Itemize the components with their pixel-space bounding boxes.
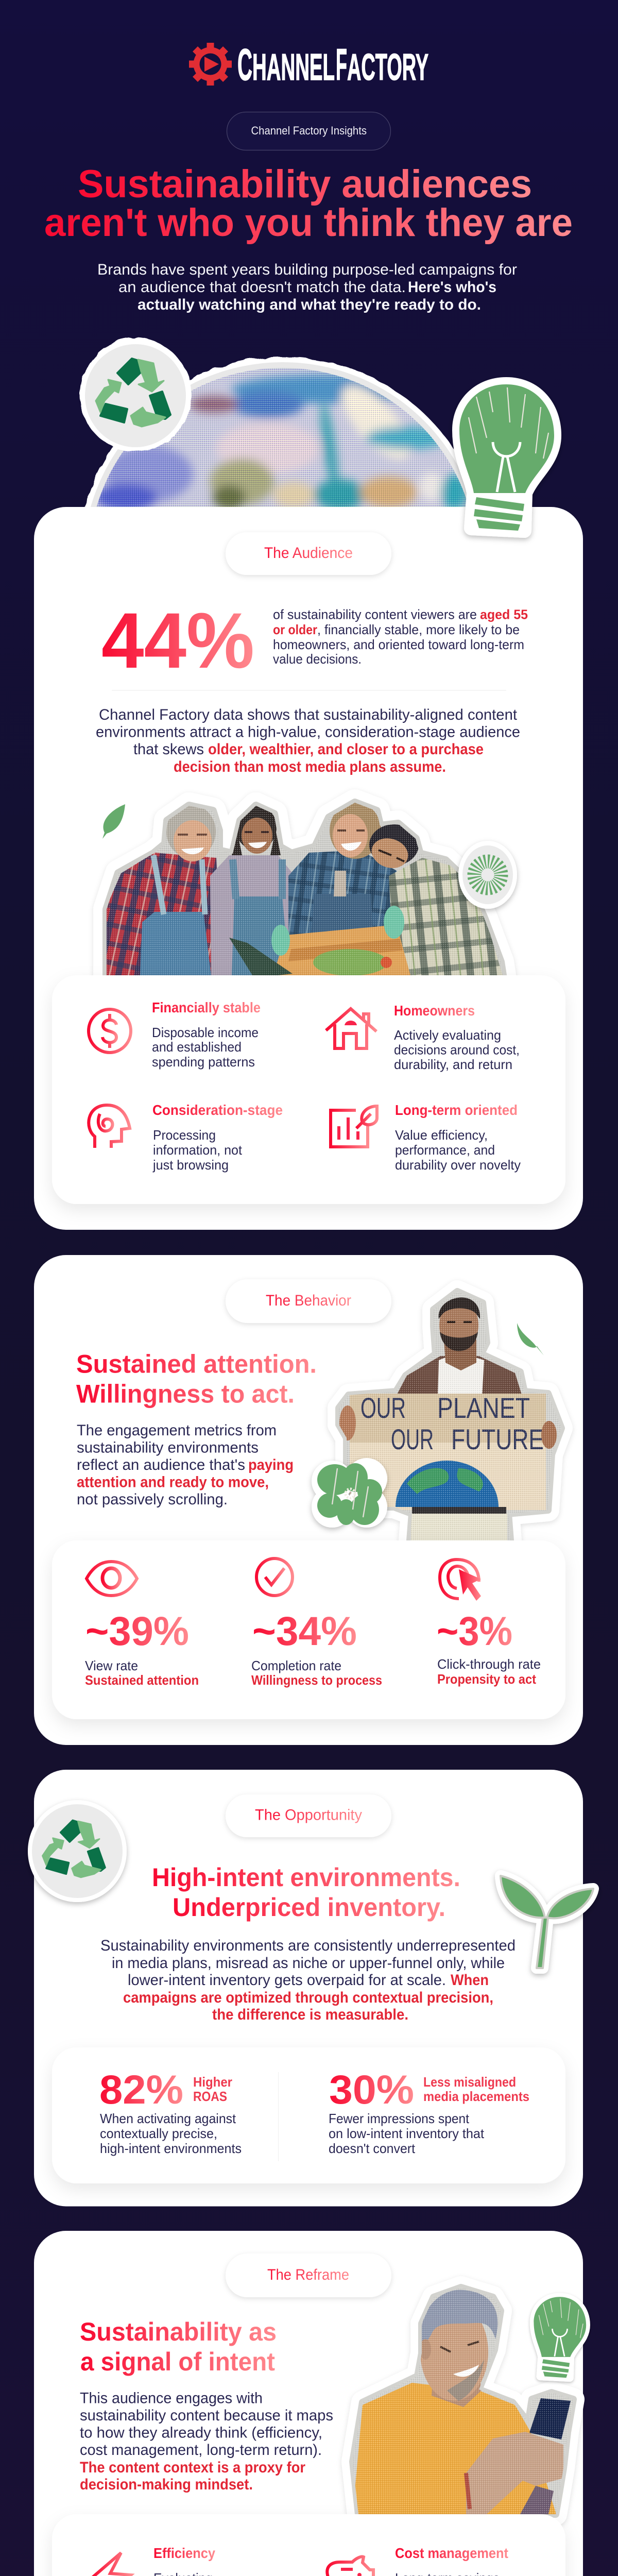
- trait: financially stable: and established: [152, 1039, 242, 1055]
- sticker: green starburst: [458, 841, 517, 909]
- icon: chart and leaf: [331, 1106, 377, 1147]
- metric: click-through rate: ~3%: [437, 1608, 512, 1654]
- icon: eye: [87, 1562, 137, 1596]
- intro text: an audience that doesn't match the data.: [118, 279, 406, 296]
- body text: When: [451, 1972, 489, 1989]
- icon: click target: [440, 1560, 481, 1601]
- hero sticker: recycle badge: [80, 338, 191, 451]
- icon: head with spiral: [89, 1105, 130, 1148]
- paragraph: older, wealthier, and closer to a purchase: [208, 741, 484, 758]
- metric: view rate: [85, 1562, 199, 1688]
- stat description: of sustainability content viewers are: [273, 607, 477, 622]
- trait: homeowners: Actively evaluating: [394, 1027, 501, 1043]
- stat: 82% higher ROAS: [99, 2066, 242, 2156]
- icon: dollar coin: [89, 1009, 131, 1053]
- trait: consideration-stage: [89, 1102, 283, 1173]
- trait: long-term oriented: Value efficiency,: [395, 1127, 488, 1143]
- trait: homeowners: decisions around cost,: [394, 1042, 520, 1057]
- icon: lightning bolt: [92, 2553, 131, 2576]
- body text: [100, 1937, 516, 2023]
- stat: 30% less misaligned media placements: Fewer impressions spent: [329, 2111, 470, 2126]
- heading: Underpriced inventory.: [173, 1893, 445, 1922]
- logo: Channel Factory: F: [336, 40, 347, 90]
- trait: consideration-stage: Consideration-stage: [152, 1102, 283, 1118]
- trait: homeowners: [326, 1003, 520, 1072]
- pill: The Audience: The Audience: [264, 545, 353, 562]
- stat description: or older: [273, 622, 317, 637]
- icon: leaf: [517, 1323, 544, 1355]
- title: Sustainability audiences: [78, 162, 532, 206]
- signal: efficiency: [92, 2545, 283, 2576]
- stat description: , financially stable, more likely to be: [317, 622, 520, 637]
- body text: paying: [248, 1456, 294, 1473]
- heading: High-intent environments.: [152, 1863, 460, 1892]
- metric: click-through rate: Propensity to act: [437, 1671, 536, 1687]
- trait: financially stable: [89, 999, 261, 1070]
- paragraph: that skews: [133, 741, 204, 758]
- metric: completion rate: [251, 1558, 382, 1688]
- metric: completion rate: ~34%: [252, 1608, 357, 1654]
- pill: The Audience: [226, 532, 391, 575]
- metric: view rate: ~39%: [85, 1608, 189, 1654]
- body text: [80, 2389, 333, 2493]
- body text: Sustainability environments are consistently underrepresented: [100, 1937, 516, 1954]
- body text: lower-intent inventory gets overpaid for at scale.: [128, 1972, 446, 1989]
- trait: consideration-stage: just browsing: [152, 1157, 229, 1173]
- pill: The Reframe: The Reframe: [267, 2266, 349, 2283]
- trait: homeowners: Homeowners: [394, 1003, 475, 1019]
- pill: The Opportunity: The Opportunity: [255, 1806, 362, 1824]
- trait: financially stable: spending patterns: [152, 1054, 255, 1070]
- sticker: recycle badge: [28, 1800, 127, 1902]
- body text: sustainability environments: [77, 1439, 259, 1456]
- panel: The Audience: [34, 507, 583, 1230]
- title: aren't who you think they are: [44, 201, 573, 245]
- stat: 30% less misaligned media placements: [329, 2066, 529, 2156]
- metric: completion rate: Completion rate: [251, 1658, 341, 1673]
- body text: in media plans, misread as niche or upper-funnel only, while: [112, 1955, 505, 1972]
- body text: sustainability content because it maps: [80, 2407, 333, 2424]
- pill: Channel Factory Insights: Channel Factory Insights: [251, 124, 367, 137]
- sign lettering: OUR: [391, 1423, 434, 1455]
- stat: 30% less misaligned media placements: 30%: [329, 2066, 414, 2112]
- metric: click-through rate: [437, 1560, 541, 1687]
- icon: house: [326, 1009, 376, 1048]
- body text: reflect an audience that's: [77, 1456, 245, 1473]
- heading: Willingness to act.: [76, 1380, 295, 1409]
- stat: 44%: 44%: [101, 597, 254, 685]
- pill: The Reframe: [226, 2253, 391, 2297]
- logo: Channel Factory: C: [237, 40, 252, 90]
- stat description: aged 55: [480, 607, 528, 622]
- sign lettering: [362, 1398, 543, 1450]
- panel: The Behavior: [34, 1255, 583, 1745]
- card background: [34, 1255, 583, 1745]
- intro text: actually watching and what they're ready to do.: [138, 296, 481, 313]
- body text: cost management, long-term return).: [80, 2442, 322, 2459]
- body text: attention and ready to move,: [77, 1473, 269, 1491]
- body text: to how they already think (efficiency,: [80, 2425, 322, 2441]
- panel: engagement metrics: [52, 1540, 565, 1719]
- logo: Channel Factory: HANNEL: [252, 47, 335, 88]
- body text: the difference is measurable.: [212, 2006, 408, 2023]
- stat: 30% less misaligned media placements: media placements: [423, 2089, 529, 2104]
- sign lettering: PLANET: [437, 1392, 530, 1424]
- title: [44, 162, 573, 245]
- heading: [80, 2317, 277, 2376]
- sign lettering: OUR: [360, 1392, 406, 1424]
- icon: leaf: [102, 804, 125, 839]
- body text: The content context is a proxy for: [80, 2459, 305, 2476]
- pill: The Opportunity: [226, 1794, 391, 1837]
- paragraph: [96, 706, 520, 775]
- paragraph: decision than most media plans assume.: [174, 758, 446, 775]
- heading: Sustained attention.: [76, 1350, 317, 1379]
- panel: performance stats: [52, 2047, 565, 2183]
- photo: smiling man with phone: [345, 2282, 582, 2519]
- body text: This audience engages with: [80, 2389, 263, 2407]
- stat: 82% higher ROAS: Higher: [193, 2074, 232, 2090]
- stat description: [273, 607, 528, 667]
- trait: consideration-stage: information, not: [153, 1142, 243, 1158]
- stat: 82% higher ROAS: ROAS: [193, 2089, 227, 2104]
- trait: long-term oriented: performance, and: [395, 1142, 495, 1158]
- signal: efficiency: Efficiency: [153, 2545, 215, 2561]
- body text: [77, 1422, 294, 1508]
- logo: Channel Factory: [189, 40, 428, 90]
- trait: homeowners: durability, and return: [394, 1057, 512, 1072]
- stat: 82% higher ROAS: When activating against: [100, 2111, 236, 2126]
- pill: Channel Factory Insights: [227, 112, 390, 150]
- photo: man holding sign: [335, 1283, 566, 1546]
- trait: long-term oriented: [331, 1102, 521, 1173]
- stat: 30% less misaligned media placements: doesn't convert: [329, 2141, 416, 2156]
- card background: [34, 1770, 583, 2206]
- card background: [34, 507, 583, 1230]
- body text: The engagement metrics from: [77, 1422, 277, 1439]
- trait: consideration-stage: Processing: [153, 1127, 216, 1143]
- stat: 82% higher ROAS: high-intent environments: [100, 2141, 242, 2156]
- heading: a signal of intent: [80, 2347, 275, 2376]
- paragraph: Channel Factory data shows that sustainability-aligned content: [99, 706, 518, 723]
- panel: The Reframe: [34, 2231, 586, 2576]
- stat: 82% higher ROAS: 82%: [99, 2066, 183, 2112]
- sticker: sprout: [501, 1876, 593, 1968]
- intro text: Here's who's: [408, 279, 496, 296]
- panel: The Opportunity: [28, 1770, 593, 2206]
- heading: [76, 1350, 317, 1409]
- hero sticker: light bulb: [459, 384, 554, 531]
- signal: cost management: [327, 2545, 508, 2576]
- trait: financially stable: Disposable income: [152, 1025, 259, 1040]
- card background: [34, 2231, 583, 2576]
- trait: long-term oriented: durability over novelty: [395, 1157, 521, 1173]
- stat: 30% less misaligned media placements: Less misaligned: [423, 2074, 516, 2090]
- icon: gear with play button: [189, 43, 232, 86]
- heading: Sustainability as: [80, 2317, 277, 2346]
- metric: view rate: View rate: [85, 1658, 138, 1673]
- logo: Channel Factory: ACTORY: [347, 47, 428, 88]
- paragraph: environments attract a high-value, consideration-stage audience: [96, 723, 520, 741]
- metric: completion rate: Willingness to process: [251, 1672, 382, 1688]
- stat: 82% higher ROAS: contextually precise,: [100, 2126, 217, 2141]
- photo: four smiling women with a vegetable crate: [103, 799, 510, 979]
- pill: The Behavior: [226, 1279, 391, 1323]
- body text: campaigns are optimized through contextual precision,: [123, 1989, 493, 2006]
- sticker: clover: [312, 1458, 387, 1528]
- icon: check circle: [256, 1558, 293, 1596]
- body text: not passively scrolling.: [77, 1491, 228, 1508]
- sign lettering: FUTURE: [451, 1423, 544, 1455]
- icon: piggy bank: [327, 2556, 373, 2576]
- stat: 30% less misaligned media placements: on low-intent inventory that: [329, 2126, 485, 2141]
- panel: audience traits: [52, 975, 565, 1204]
- pill: The Behavior: The Behavior: [266, 1292, 351, 1309]
- trait: long-term oriented: Long-term oriented: [395, 1102, 518, 1118]
- trait: financially stable: Financially stable: [152, 999, 261, 1015]
- panel: decision signals: [52, 2514, 565, 2576]
- heading: [152, 1863, 460, 1922]
- sticker: light bulb: [534, 2297, 586, 2378]
- signal: cost management: Cost management: [395, 2545, 508, 2561]
- metric: view rate: Sustained attention: [85, 1672, 199, 1688]
- stat description: value decisions.: [273, 651, 362, 667]
- hero illustration: halftone globe: [84, 357, 467, 507]
- stat description: homeowners, and oriented toward long-term: [273, 637, 524, 652]
- intro text: [97, 261, 517, 313]
- body text: decision-making mindset.: [80, 2476, 253, 2493]
- intro text: Brands have spent years building purpose-led campaigns for: [97, 261, 517, 278]
- metric: click-through rate: Click-through rate: [437, 1656, 541, 1672]
